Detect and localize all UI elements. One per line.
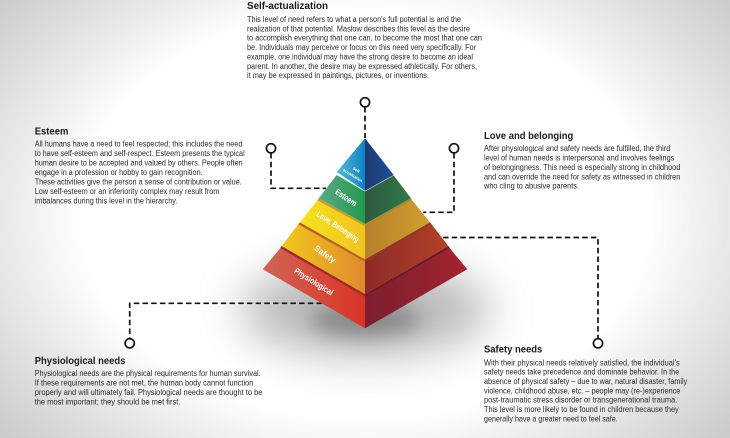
pyramid <box>263 138 467 328</box>
text block: love and belonging: who cling to abusive parents. <box>483 182 579 191</box>
text block: esteem: Low self-esteem or an inferiority complex may result from <box>35 187 219 196</box>
text block: safety needs: generally have a greater need to feel safe. <box>484 414 618 423</box>
text block: physiological needs: Physiological needs <box>35 355 126 367</box>
tier: self-actualization: Self <box>352 166 361 174</box>
connector: esteem <box>266 144 326 188</box>
tier: physiological <box>263 246 467 328</box>
pyramid shadow <box>240 264 490 356</box>
text block: self-actualization: to accomplish everything that one can, to become the most that one can <box>247 34 482 43</box>
text block: self-actualization: be. Individuals may perceive or focus on this need very specifically. For <box>247 43 476 52</box>
text block: self-actualization <box>247 0 482 80</box>
connector: love and belonging <box>423 144 459 212</box>
tier: safety: Safety <box>313 243 338 265</box>
text block: safety needs: absence of physical safety – due to war, natural disaster, family <box>484 377 687 386</box>
text block: self-actualization: Self-actualization <box>247 0 328 12</box>
connector: physiological needs <box>125 303 322 348</box>
text block: esteem: engage in a profession or hobby to gain recognition. <box>35 168 203 177</box>
text block: physiological needs: the most important; they should be met first. <box>35 397 180 406</box>
tier: safety <box>282 222 448 294</box>
text block: esteem: All humans have a need to feel respected; this includes the need <box>35 140 242 149</box>
text block: esteem: Esteem <box>35 126 68 138</box>
text block: esteem: human desire to be accepted and valued by others. People often <box>35 158 243 168</box>
text block: love and belonging <box>483 130 680 191</box>
connector: self-actualization <box>360 98 370 138</box>
text block: esteem: These activities give the person a sense of contribution or value. <box>35 177 242 186</box>
text block: self-actualization: realization of that potential. Maslow describes this level as the desire <box>247 24 470 33</box>
text block: safety needs <box>484 344 687 423</box>
text block: safety needs: Safety needs <box>484 344 542 356</box>
text block: esteem <box>35 126 245 205</box>
tier: physiological: Physiological <box>293 266 335 297</box>
text block: physiological needs <box>35 355 262 406</box>
text block: love and belonging: level of human needs is interpersonal and involves feelings <box>484 154 674 162</box>
text block: safety needs: post-traumatic stress disorder or transgenerational trauma. <box>484 396 677 405</box>
text block: safety needs: This level is more likely to be found in children because they <box>484 405 679 414</box>
tier: love and belonging: Love, Belonging <box>315 209 361 244</box>
text block: love and belonging: After physiological and safety needs are fulfilled, the third <box>484 144 670 153</box>
text block: esteem: to have self-esteem and self-respect. Esteem presents the typical <box>35 149 245 158</box>
text block: safety needs: safety needs take precedence and dominate behavior. In the <box>484 368 679 377</box>
tier: love and belonging <box>300 198 430 259</box>
text block: love and belonging: Love and belonging <box>484 130 573 142</box>
tier: esteem: Esteem <box>333 187 359 209</box>
tier: self-actualization: actualization <box>342 167 364 183</box>
text block: self-actualization: parent. In another, the desire may be expressed athletically. For others, <box>247 62 477 71</box>
text block: safety needs: With their physical needs relatively satisfied, the individual's <box>484 358 680 367</box>
tier: self-actualization <box>337 138 394 191</box>
text block: love and belonging: and can override the need for safety as witnessed in children <box>484 172 680 181</box>
text block: safety needs: violence, childhood abuse, etc. – people may (re-)experience <box>484 386 680 395</box>
text block: physiological needs: Physiological needs are the physical requirements for human survival. <box>35 369 261 378</box>
text block: self-actualization: This level of need refers to what a person's full potential is and the <box>247 15 461 24</box>
text block: physiological needs: If these requirements are not met, the human body cannot function <box>35 378 253 388</box>
text block: physiological needs: properly and will ultimately fail. Physiological needs are thought to be <box>35 388 262 397</box>
tier: esteem <box>319 175 411 224</box>
text block: self-actualization: it may be expressed in paintings, pictures, or inventions. <box>247 71 429 80</box>
text block: esteem: imbalances during this level in the hierarchy. <box>35 196 177 205</box>
text block: self-actualization: example, one individual may have the strong desire to become an ideal <box>247 52 473 62</box>
text block: love and belonging: of belongingness. This need is especially strong in childhood <box>484 163 680 172</box>
connector: safety needs <box>443 238 603 348</box>
